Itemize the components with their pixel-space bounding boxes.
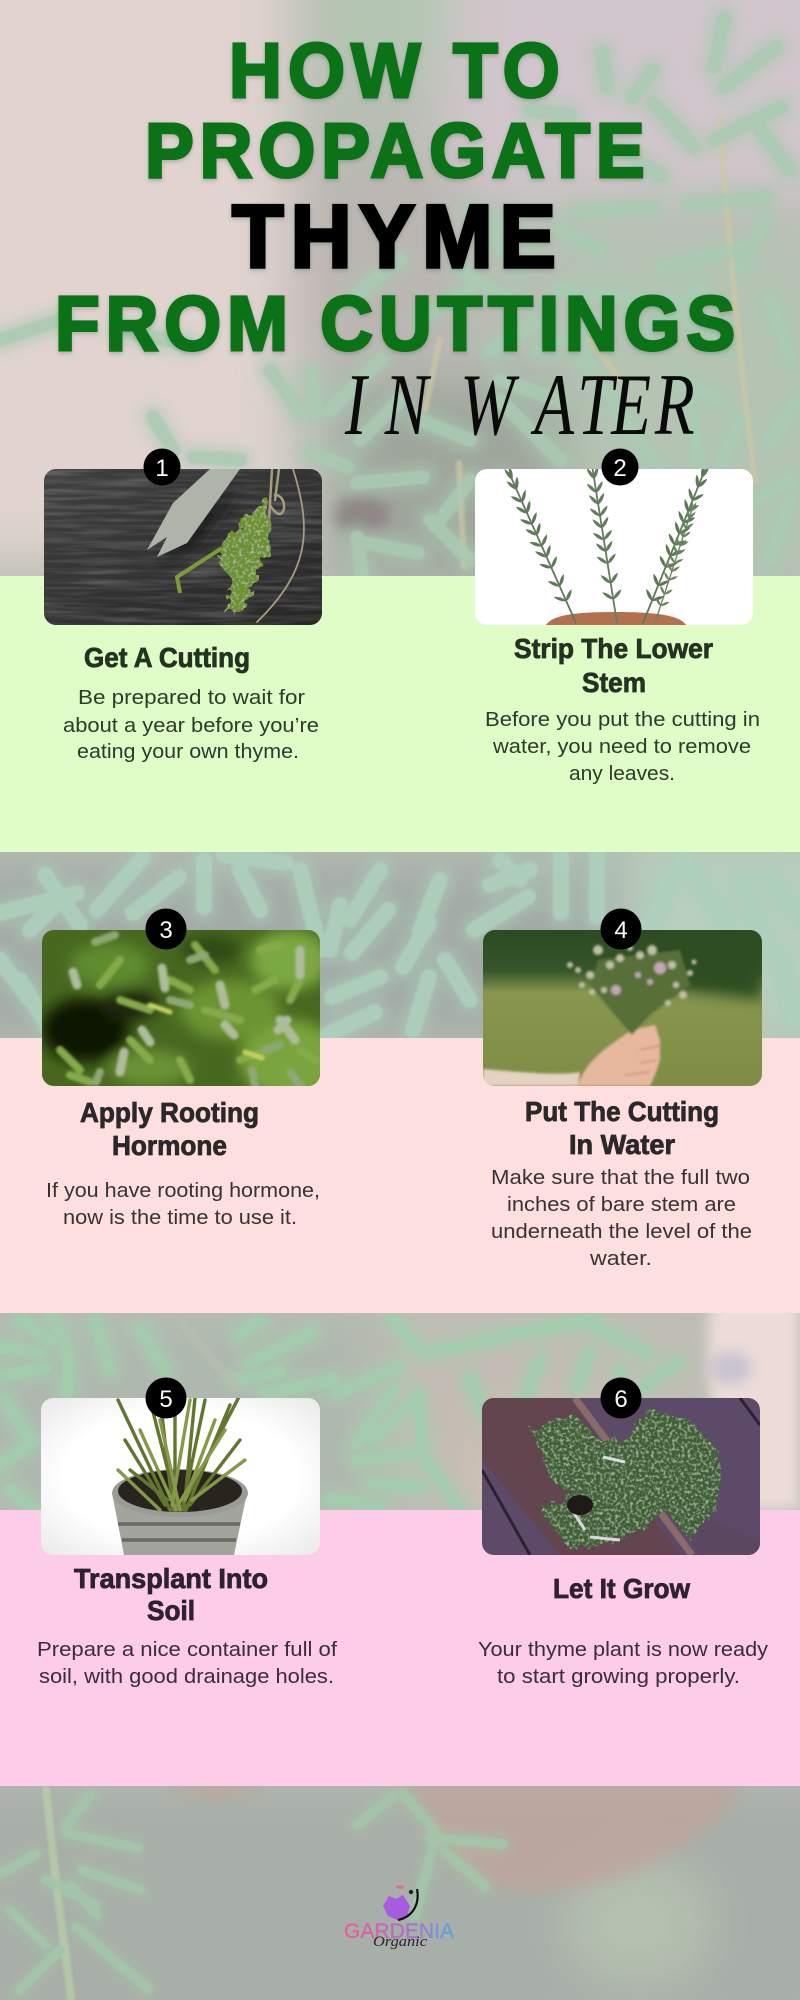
stems (425, 120, 755, 567)
step 6 card (478, 1378, 769, 1688)
body text: Your thyme plant is now ready (478, 1638, 769, 1661)
step 4 card (483, 908, 762, 1270)
logo: Gardenia Organic: GARDENIA (344, 1920, 454, 1943)
band: pink steps 3-4 (0, 1038, 800, 1313)
crisp leaves (0, 18, 800, 575)
heading: Put The Cutting (525, 1096, 719, 1127)
image: hand holding thyme bouquet (483, 930, 762, 1086)
step 1 card (44, 448, 322, 763)
body text: any leaves. (569, 762, 675, 785)
step 5 card (37, 1378, 337, 1688)
title: PROPAGATE (145, 107, 645, 193)
heading: Apply Rooting (80, 1097, 259, 1128)
badge 6 (600, 1378, 642, 1418)
badge 2: 2 (613, 455, 627, 482)
heading: In Water (569, 1129, 675, 1160)
body text: Prepare a nice container full of (37, 1638, 337, 1661)
image: plant in metal pot on white (41, 1395, 320, 1555)
body text (46, 1179, 320, 1229)
badge 3 (146, 908, 186, 950)
subtitle: in water: IN WATER (344, 356, 695, 453)
badge 1: 1 (155, 455, 169, 482)
badge 1 (144, 448, 180, 486)
body text: Before you put the cutting in (485, 708, 760, 731)
heading: Stem (582, 667, 646, 698)
step 3 card (41, 908, 340, 1229)
badge 5: 5 (159, 1386, 173, 1413)
pale blown-out corner (707, 1300, 800, 1510)
badge 4: 4 (614, 917, 628, 944)
body text (485, 708, 760, 785)
band: magenta steps 5-6 (0, 1510, 800, 1786)
body text (491, 1166, 752, 1270)
badge 6: 6 (614, 1386, 628, 1413)
hand shape bottom (400, 1784, 742, 1892)
body text: to start growing properly. (497, 1665, 740, 1688)
title: THYME (232, 187, 556, 286)
body text: If you have rooting hormone, (46, 1179, 320, 1202)
badge 5 (146, 1378, 186, 1418)
icon: purple flower (383, 1885, 418, 1920)
body text: Make sure that the full two (491, 1166, 750, 1189)
image: close-up of green thyme (42, 930, 320, 1086)
heading (80, 1097, 259, 1161)
heading (525, 1096, 719, 1160)
logo: Gardenia Organic (344, 1885, 454, 1950)
body text: inches of bare stem are (507, 1193, 736, 1216)
step 2 card (475, 448, 760, 785)
image: scissors and thyme bundle on slate (44, 469, 322, 625)
body text (478, 1638, 769, 1688)
heading: Soil (147, 1595, 195, 1626)
body text: eating your own thyme. (77, 740, 299, 763)
body text: underneath the level of the (491, 1220, 752, 1243)
heading: Transplant Into (74, 1563, 268, 1594)
title (55, 27, 735, 366)
heading: Get A Cutting (84, 642, 250, 673)
heading (74, 1563, 268, 1626)
body text: water, you need to remove (492, 735, 751, 758)
body text: soil, with good drainage holes. (39, 1665, 334, 1688)
body text: now is the time to use it. (63, 1206, 297, 1229)
heading: Strip The Lower (514, 633, 713, 664)
body text: Be prepared to wait for (78, 686, 305, 709)
badge 4 (600, 908, 642, 950)
badge 2 (602, 448, 638, 486)
image: three sprigs in pot on white (475, 469, 753, 625)
body text (63, 686, 319, 763)
body text (37, 1638, 337, 1688)
badge 3: 3 (159, 917, 173, 944)
image: potted thyme from above on deck (482, 1398, 760, 1555)
body text: water. (589, 1247, 652, 1270)
title: HOW TO (229, 27, 560, 113)
title: FROM CUTTINGS (55, 280, 735, 366)
logo: Gardenia Organic: Organic (373, 1934, 427, 1950)
heading: Hormone (112, 1130, 227, 1161)
body text: about a year before you’re (63, 714, 319, 737)
band: green steps 1-2 (0, 576, 800, 852)
heading (514, 633, 713, 698)
heading: Let It Grow (553, 1573, 690, 1604)
dark seed pod (334, 495, 390, 535)
